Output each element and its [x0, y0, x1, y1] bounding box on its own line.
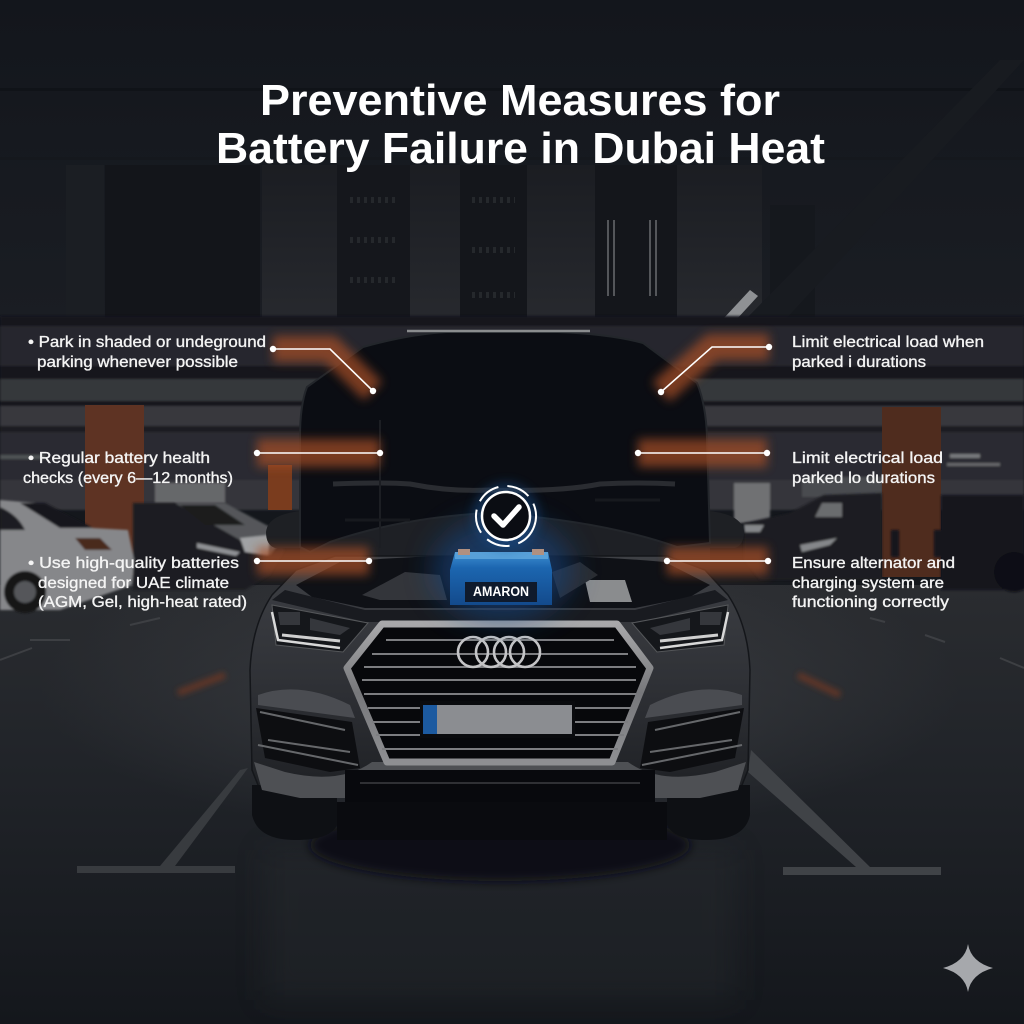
- icon: check mark badge: [468, 478, 544, 554]
- firewall under hood: [300, 505, 710, 575]
- text: electrical load top: Limit electrical load when: [792, 334, 984, 351]
- text: electrical load middle: parked lo durations: [792, 470, 935, 487]
- orange pillars: [85, 405, 941, 577]
- car shadow: [310, 809, 690, 881]
- connector: alternator: [664, 558, 771, 564]
- text: health checks: [23, 450, 233, 487]
- floor markings: [0, 618, 1024, 875]
- engine bay: [272, 555, 728, 622]
- connector: park in shade: [270, 346, 376, 394]
- car: [250, 331, 750, 840]
- text: alternator: Ensure alternator and: [792, 555, 955, 572]
- text: quality batteries: [28, 555, 247, 611]
- connector: electrical load top: [658, 344, 772, 395]
- text: electrical load top: [792, 334, 984, 371]
- connector: health checks: [254, 450, 383, 456]
- text: quality batteries: • Use high-quality batteries: [28, 555, 239, 572]
- text: health checks: • Regular battery health: [28, 450, 210, 467]
- car body: [250, 556, 750, 795]
- title: Battery Failure in Dubai Heat: [216, 124, 825, 173]
- lower bumper: [254, 762, 746, 798]
- battery: [432, 518, 572, 622]
- text: quality batteries: designed for UAE climate: [38, 575, 229, 592]
- connector: electrical load middle: [635, 450, 770, 456]
- parked cars left: [0, 500, 285, 613]
- grille: [347, 624, 650, 762]
- connector: quality batteries: [254, 558, 372, 564]
- title: Preventive Measures for: [260, 76, 780, 125]
- text: electrical load middle: [792, 450, 943, 487]
- licence plate: [420, 701, 575, 738]
- icon: four-point star watermark: [943, 944, 993, 992]
- diagonal duct and lamp: [724, 60, 1024, 320]
- floor reflection: [265, 850, 735, 1000]
- side mirrors: [266, 511, 744, 548]
- parked cars right: [744, 493, 1024, 592]
- hood inner ribs: [333, 331, 675, 548]
- text: quality batteries: (AGM, Gel, high-heat rated): [38, 594, 247, 611]
- skyline through opening: [66, 165, 815, 320]
- headlights: [272, 605, 728, 652]
- wheels: [252, 785, 750, 840]
- text: alternator: [792, 555, 955, 611]
- bumper air intakes: [256, 708, 744, 772]
- text: park in shade: • Park in shaded or undeground: [28, 334, 266, 351]
- text: health checks: checks (every 6—12 months): [23, 470, 233, 487]
- floor: [0, 585, 1024, 1024]
- text: park in shade: parking whenever possible: [37, 354, 238, 371]
- text: alternator: functioning correctly: [792, 594, 949, 611]
- open hood: [300, 332, 710, 552]
- text: park in shade: [28, 334, 266, 371]
- text: electrical load middle: Limit electrical load: [792, 450, 943, 467]
- logo: four rings: [458, 637, 540, 667]
- text: electrical load top: parked i durations: [792, 354, 926, 371]
- battery: AMARON: [473, 584, 529, 599]
- fender highlights: [258, 689, 742, 718]
- battery label: [465, 582, 537, 602]
- text: alternator: charging system are: [792, 575, 944, 592]
- title: [216, 76, 825, 173]
- ceiling beams: [0, 316, 1024, 523]
